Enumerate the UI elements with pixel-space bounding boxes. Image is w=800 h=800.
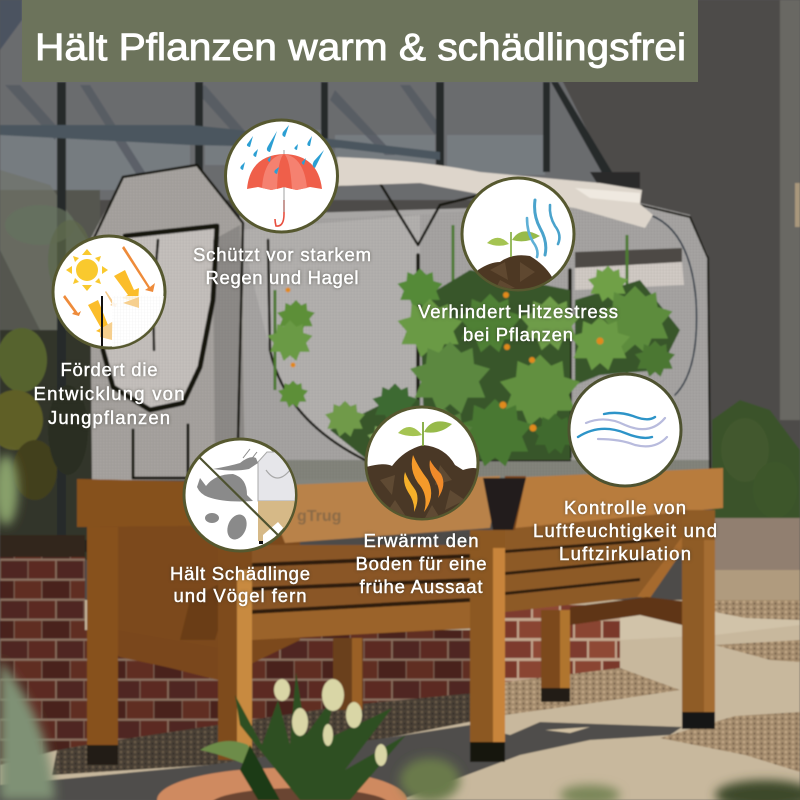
slugs and insects bbox=[197, 449, 258, 542]
icon: sun and light rays bbox=[53, 236, 172, 351]
icon: seedling with cooling air bbox=[462, 178, 574, 300]
soil bbox=[367, 445, 477, 518]
raindrops bbox=[240, 125, 324, 174]
label: seedlings: Fördert die bbox=[60, 359, 158, 380]
brick wall bbox=[0, 555, 620, 765]
label: humidity and airflow: Kontrolle von bbox=[564, 497, 686, 518]
left end panel bbox=[77, 479, 300, 680]
crossing line bbox=[198, 456, 281, 538]
label: seedlings: Entwicklung von bbox=[34, 383, 184, 404]
front slats bbox=[252, 545, 480, 640]
label: humidity and airflow: Luftfeuchtigkeit und bbox=[533, 520, 717, 541]
label: pests: und Vögel fern bbox=[174, 585, 306, 606]
label: humidity and airflow: Luftzirkulation bbox=[559, 543, 691, 564]
seedling bbox=[487, 231, 540, 257]
heat flames bbox=[404, 455, 443, 512]
label: pests: Hält Schädlinge bbox=[170, 563, 310, 584]
title text: Hält Pflanzen warm & schädlingsfrei bbox=[35, 27, 686, 69]
soil mound bbox=[478, 255, 552, 289]
greenhouse glass bbox=[0, 0, 640, 560]
mesh cover bbox=[90, 157, 712, 486]
cover left end panel bbox=[90, 165, 245, 480]
icon: warmed soil bbox=[366, 407, 480, 525]
black funnel bbox=[483, 478, 526, 530]
arrows bbox=[63, 246, 155, 337]
wave lines bbox=[578, 413, 667, 446]
stone ledge and paving bbox=[0, 518, 800, 800]
label: heat stress: Verhindert Hitzestress bbox=[418, 301, 618, 322]
label: rain protection: Regen und Hagel bbox=[206, 267, 358, 288]
front legs bbox=[87, 527, 118, 745]
rear rail bbox=[570, 597, 707, 625]
label: heat stress: bei Pflanzen bbox=[463, 324, 573, 345]
label: humidity and airflow bbox=[533, 497, 717, 564]
dark wall at right bbox=[0, 0, 800, 620]
label: heat stress bbox=[418, 301, 618, 345]
cucumber plants bbox=[268, 225, 680, 470]
black zip outlines bbox=[93, 165, 710, 478]
mesh overlay on icon bbox=[112, 296, 164, 347]
label: seedlings: Jungpflanzen bbox=[48, 407, 170, 428]
icon: air waves bbox=[569, 374, 681, 486]
label: warms soil: Boden für eine bbox=[356, 553, 486, 574]
label: pests bbox=[170, 563, 310, 606]
air streams bbox=[527, 200, 559, 257]
seedling bbox=[398, 421, 452, 446]
bird panel bbox=[258, 452, 295, 544]
umbrella bbox=[247, 150, 322, 226]
icon: umbrella in rain bbox=[226, 120, 338, 232]
potted plant bbox=[157, 672, 407, 800]
wooden raised bed bbox=[77, 468, 723, 765]
right slats bbox=[505, 510, 690, 612]
rear legs bbox=[333, 638, 363, 710]
label: warms soil bbox=[356, 530, 486, 597]
blurred foreground leaves bbox=[0, 455, 800, 800]
title banner bbox=[22, 0, 698, 82]
cover right body bbox=[240, 203, 711, 475]
logo on board: gTrug bbox=[297, 508, 341, 525]
label: warms soil: Erwärmt den bbox=[364, 530, 478, 551]
icon: slugs, insects and bird, crossed out bbox=[184, 439, 300, 551]
label: rain protection: Schützt vor starkem bbox=[193, 244, 371, 265]
hedge at right bbox=[712, 400, 800, 525]
cream rolled-up cover bbox=[337, 157, 653, 228]
front top board bbox=[262, 476, 500, 543]
label: warms soil: frühe Aussaat bbox=[360, 576, 482, 597]
sun bbox=[66, 249, 108, 291]
label: rain protection bbox=[193, 244, 371, 288]
label: seedlings bbox=[34, 359, 184, 428]
plants inside greenhouse bbox=[0, 205, 92, 500]
